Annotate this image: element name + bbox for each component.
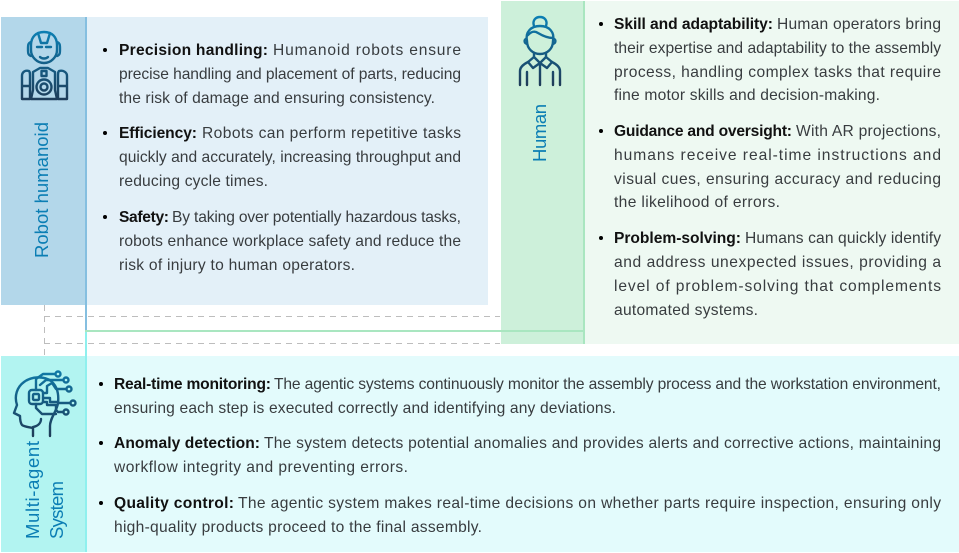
system bullet: real-time monitoring: The agentic systems continuously monitor the assembly process and the workstation environment, xyxy=(274,376,941,393)
human bullet: skill and adaptability: fine motor skills and decision-making. xyxy=(614,87,880,104)
system label text: Multi-agent xyxy=(22,441,43,539)
panel: human xyxy=(85,1,959,344)
system accent strip xyxy=(85,332,87,552)
robot bullet: precision handling: precise handling and placement of parts, reducing xyxy=(119,66,461,83)
system bullet: quality control: Quality control: xyxy=(114,495,234,512)
human label background xyxy=(501,1,583,344)
icon: brain circuit head xyxy=(14,372,76,436)
robot content background xyxy=(87,17,488,305)
system bullet: anomaly detection: Anomaly detection: xyxy=(114,435,260,452)
human bullet: problem-solving xyxy=(599,230,941,319)
human bullet: guidance and oversight: the likelihood of errors. xyxy=(614,194,780,211)
system content background xyxy=(87,356,959,552)
robot bullet: efficiency xyxy=(103,125,461,190)
connector lines xyxy=(44,305,500,356)
robot accent strip xyxy=(85,17,87,331)
human bullet: guidance and oversight xyxy=(599,123,941,211)
human label text: Human xyxy=(529,104,550,162)
human bullet: problem-solving: Humans can quickly identify xyxy=(745,230,941,247)
system bullet: real-time monitoring xyxy=(99,376,941,417)
system bullet: quality control: high-quality products proceed to the final assembly. xyxy=(114,519,482,536)
human bullet: problem-solving: Problem-solving: xyxy=(614,230,741,247)
system bullet: quality control: The agentic system makes real-time decisions on whether parts require inspection, ensuring only xyxy=(238,495,941,512)
green connector line xyxy=(85,330,583,332)
human bullet: skill and adaptability: their expertise and adaptability to the assembly xyxy=(614,40,941,57)
human bullet: skill and adaptability: Human operators bring xyxy=(777,16,941,33)
human bullet: problem-solving: level of problem-solving that complements xyxy=(614,278,941,295)
robot bullet: safety xyxy=(103,209,461,274)
human bullet: guidance and oversight: With AR projections, xyxy=(796,123,941,140)
human bullet: skill and adaptability: process, handling complex tasks that require xyxy=(614,64,941,81)
robot bullet: precision handling: the risk of damage and ensuring consistency. xyxy=(119,90,435,107)
robot bullet: safety: Safety: xyxy=(119,209,169,226)
system bullet: anomaly detection: The system detects potential anomalies and provides alerts and corrective actions, maintaining xyxy=(264,435,941,452)
robot bullet: efficiency: Efficiency: xyxy=(119,125,197,142)
robot bullet: precision handling: Humanoid robots ensure xyxy=(273,42,461,59)
robot bullet: precision handling: Precision handling: xyxy=(119,42,268,59)
robot bullet: safety: robots enhance workplace safety and reduce the xyxy=(119,233,461,250)
robot bullet: efficiency: quickly and accurately, increasing throughput and xyxy=(119,149,461,166)
system bullet: real-time monitoring: ensuring each step is executed correctly and identifying any deviations. xyxy=(114,400,616,417)
human bullet: skill and adaptability xyxy=(599,16,941,104)
system label background xyxy=(1,356,85,552)
robot bullet: precision handling xyxy=(103,42,461,107)
icon: robot xyxy=(22,32,67,99)
human bullet: guidance and oversight: Guidance and oversight: xyxy=(614,123,792,140)
human accent strip xyxy=(583,1,585,344)
system label text xyxy=(22,441,67,539)
robot label background xyxy=(1,17,85,305)
human content background xyxy=(585,1,959,344)
human bullet: guidance and oversight: humans receive real-time instructions and xyxy=(614,147,941,164)
panel: multi-agent system xyxy=(1,332,959,552)
robot bullet: efficiency: Robots can perform repetitive tasks xyxy=(202,125,461,142)
panel: robot humanoid xyxy=(1,17,488,331)
robot bullet: efficiency: reducing cycle times. xyxy=(119,173,268,190)
human bullet: guidance and oversight: visual cues, ensuring accuracy and reducing xyxy=(614,171,941,188)
robot bullet: safety: risk of injury to human operators. xyxy=(119,257,355,274)
system bullet: anomaly detection xyxy=(99,435,941,476)
system bullet: anomaly detection: workflow integrity and preventing errors. xyxy=(113,459,408,476)
robot label text: Robot humanoid xyxy=(31,122,52,258)
human bullet: problem-solving: and address unexpected issues, providing a xyxy=(614,254,941,271)
human bullet: skill and adaptability: Skill and adaptability: xyxy=(614,16,773,33)
robot bullet: safety: By taking over potentially hazardous tasks, xyxy=(172,209,461,226)
icon: human xyxy=(520,17,560,85)
human bullet: problem-solving: automated systems. xyxy=(614,302,758,319)
system bullet: real-time monitoring: Real-time monitoring: xyxy=(114,376,271,393)
system bullet: quality control xyxy=(99,495,941,536)
system label text: System xyxy=(46,481,67,539)
